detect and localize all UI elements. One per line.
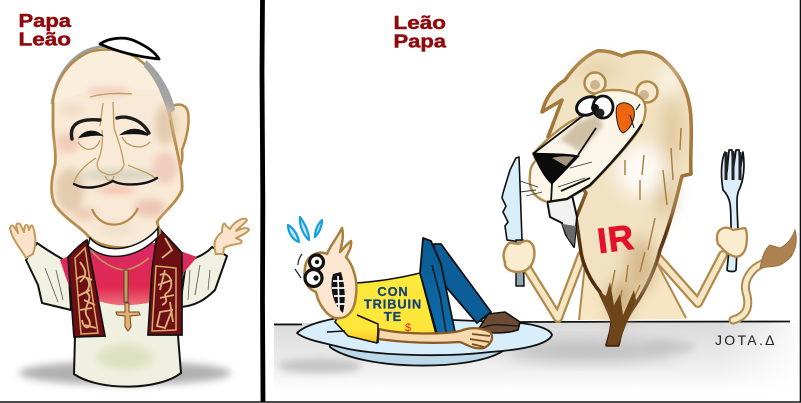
illustration: pope caricature bbox=[10, 38, 249, 387]
knife bbox=[502, 157, 524, 286]
sweat drops bbox=[288, 217, 322, 242]
back leg bbox=[433, 244, 491, 323]
eyes bbox=[305, 255, 324, 286]
grey hair bbox=[52, 46, 140, 104]
eyebrows bbox=[71, 117, 149, 139]
mane shading bbox=[578, 62, 682, 320]
right fist bbox=[717, 228, 747, 257]
ears bbox=[584, 72, 658, 102]
IR label: IR bbox=[595, 218, 637, 261]
worry marks bbox=[295, 254, 302, 278]
left fist bbox=[504, 241, 534, 272]
white collar bbox=[88, 228, 158, 256]
lion nose bbox=[533, 153, 579, 184]
fork bbox=[722, 150, 744, 272]
right hand bbox=[214, 219, 249, 254]
right sleeve bbox=[180, 247, 227, 307]
mane bbox=[542, 51, 691, 345]
sleeve folds bbox=[45, 265, 210, 302]
muzzle lines bbox=[534, 112, 596, 191]
signature: JOTA.Δ bbox=[715, 332, 777, 348]
lion head bbox=[530, 90, 645, 202]
cross on cord bbox=[91, 250, 149, 331]
eyes bbox=[80, 130, 148, 137]
yellow shirt bbox=[335, 273, 436, 343]
face bbox=[52, 50, 182, 248]
illustration: taxpayer lying on the plate bbox=[288, 217, 520, 348]
forehead wrinkles and nose bbox=[90, 93, 132, 180]
lion body bbox=[578, 258, 687, 320]
right stole bbox=[148, 227, 182, 335]
divider: thick vertical line bbox=[262, 0, 263, 402]
heading text: Leão Papa: Papa bbox=[394, 30, 447, 52]
chin line bbox=[92, 208, 138, 225]
skullcap bbox=[100, 38, 159, 59]
left sleeve bbox=[26, 243, 71, 310]
lion eyes bbox=[574, 93, 613, 119]
plate bbox=[297, 316, 552, 366]
muzzle shading bbox=[560, 114, 603, 152]
heading text: Papa Leão: Papa bbox=[18, 10, 72, 31]
mouth with teeth bbox=[331, 272, 345, 313]
front leg bbox=[420, 238, 455, 334]
jaw and throat bbox=[547, 195, 577, 247]
head bbox=[304, 228, 356, 318]
shirt text bbox=[364, 284, 422, 324]
whiskers bbox=[520, 162, 592, 196]
heading text: Leão Papa bbox=[394, 12, 447, 52]
face shading bbox=[56, 87, 177, 236]
left stole bbox=[68, 240, 105, 337]
panel: table surface bbox=[274, 322, 800, 401]
heading text: Papa Leão: Leão bbox=[18, 28, 71, 50]
shirt text: CON bbox=[377, 284, 409, 299]
lion tail bbox=[733, 230, 796, 320]
heading text: Papa Leão bbox=[18, 10, 72, 50]
jaw outline bbox=[547, 124, 642, 202]
dollar sign: $ bbox=[405, 322, 411, 334]
left hand bbox=[10, 223, 35, 258]
shirt text: TE bbox=[384, 309, 402, 324]
ear bbox=[170, 105, 189, 168]
pink mozzetta bbox=[60, 243, 197, 305]
hair wedge bbox=[144, 60, 175, 114]
dark mane tip bbox=[600, 282, 636, 345]
top of head, no outline bbox=[54, 51, 160, 103]
heading text: Leão Papa: Leão bbox=[394, 12, 446, 33]
shirt sleeve edge bbox=[327, 315, 378, 343]
shirt text: TRIBUIN bbox=[364, 296, 422, 312]
eye bags and cheek lines bbox=[74, 120, 181, 182]
illustration: lion with knife and fork bbox=[502, 51, 796, 345]
shoes bbox=[478, 312, 520, 333]
orange cheek bbox=[616, 103, 634, 133]
shadow under pope bbox=[19, 361, 231, 385]
mouth bbox=[74, 178, 157, 188]
right arm bbox=[658, 255, 723, 303]
mane hair strokes bbox=[610, 128, 681, 320]
left arm bbox=[525, 255, 582, 318]
arm bbox=[378, 328, 492, 348]
robe skirt bbox=[74, 298, 181, 387]
